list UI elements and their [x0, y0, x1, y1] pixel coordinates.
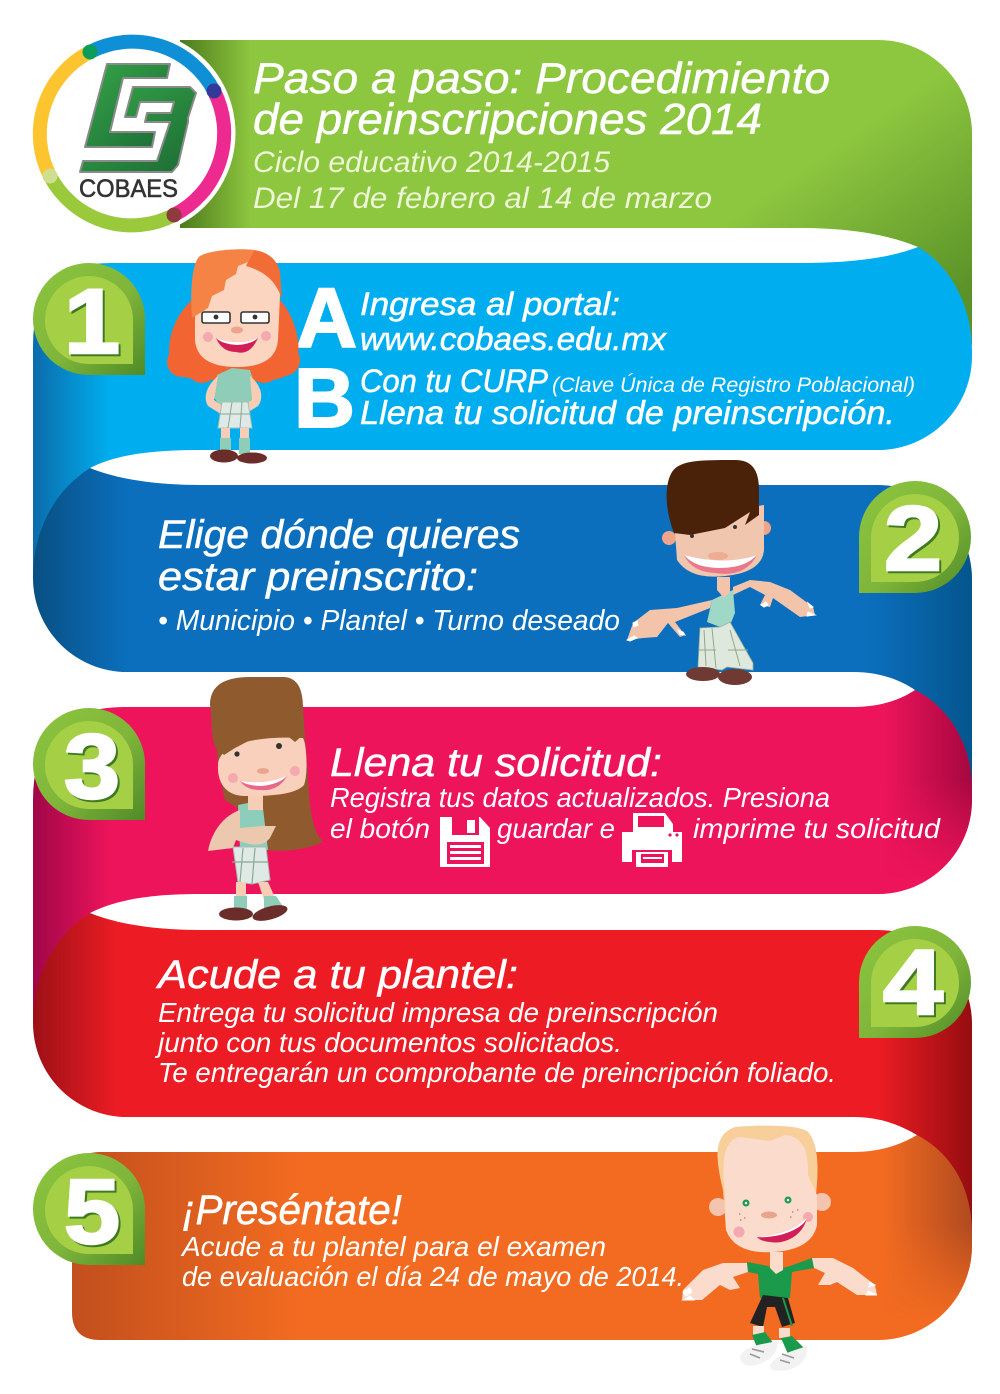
badge: number 3: [33, 708, 145, 820]
badge: number 2: [859, 481, 971, 593]
panel: step 1 blue band: [33, 228, 972, 578]
text: step 4: junto con tus documentos solicitados.: [154, 1027, 622, 1058]
badge: number 4: 4: [885, 934, 945, 1036]
character: boy with brown hair: [627, 460, 815, 685]
big letters A and B: A: [296, 271, 357, 365]
badge: number 4: [859, 926, 971, 1038]
icon: printer: [622, 813, 682, 867]
character: blond boy in sports uniform: [682, 1126, 877, 1371]
subtitle: dates: [253, 146, 712, 215]
text: step 2: Elige dónde quieres: [158, 513, 520, 557]
text: step 2: estar preinscrito:: [158, 555, 478, 599]
badge: number 5: 5: [66, 1163, 122, 1265]
text: step 2: [158, 513, 620, 637]
badge: number 3: 3: [64, 716, 120, 818]
badge: number 4: 4: [883, 932, 943, 1034]
title: [253, 54, 830, 144]
badge: number 5: [33, 1153, 145, 1265]
badge: number 1: [33, 263, 145, 375]
badge: number 3: 3: [66, 718, 122, 820]
text: step 5: [180, 1186, 684, 1292]
icon: floppy disk: [440, 817, 490, 867]
text: step 3: Llena tu solicitud:: [330, 741, 662, 785]
badge: number 2: 2: [886, 490, 944, 592]
text: step 1 instructions: Ingresa al portal:: [360, 286, 620, 322]
text: step 2: • Municipio • Plantel • Turno deseado: [158, 605, 620, 637]
text: step 3: imprime tu solicitud: [693, 813, 941, 844]
character: girl with long brown hair: [208, 677, 323, 924]
badge: number 2: 2: [884, 488, 942, 590]
title: Paso a paso: Procedimiento: [253, 54, 830, 103]
logo: COBAES: COBAES: [79, 175, 178, 203]
panel: step 4 red band: [33, 894, 972, 1240]
text: step 1 instructions: Con tu CURP: [360, 363, 549, 399]
text: step 3: guardar e: [497, 813, 615, 844]
text: step 1 instructions: Llena tu solicitud de preinscripción.: [360, 394, 895, 431]
text: step 1 instructions: [360, 286, 915, 431]
panel: step 3 magenta band: [33, 672, 972, 1023]
text: step 3: [330, 741, 941, 844]
text: step 3: Registra tus datos actualizados. Presiona: [330, 782, 830, 813]
text: step 4: Te entregarán un comprobante de preincripción foliado.: [158, 1057, 836, 1088]
text: step 5: ¡Preséntate!: [182, 1186, 402, 1233]
badge: number 1: 1: [66, 273, 122, 375]
text: step 1 instructions: (Clave Única de Registro Poblacional): [552, 374, 915, 397]
text: step 5: Acude a tu plantel para el examen: [180, 1231, 606, 1262]
text: step 4: Entrega tu solicitud impresa de preinscripción: [158, 997, 718, 1028]
big letters A and B: B: [294, 351, 355, 445]
subtitle: dates: Del 17 de febrero al 14 de marzo: [253, 182, 712, 215]
big letters A and B: [294, 271, 357, 445]
badge: number 5: 5: [64, 1161, 120, 1263]
text: step 4: Acude a tu plantel:: [156, 953, 518, 997]
panel: step 2 dark blue band: [33, 450, 972, 800]
panel: step 5 orange band: [33, 1117, 972, 1340]
text: step 4: [154, 953, 836, 1088]
panel: header band: [180, 40, 972, 345]
text: step 5: de evaluación el día 24 de mayo de 2014.: [182, 1261, 684, 1292]
title: de preinscripciones 2014: [253, 95, 762, 144]
logo: COBAES: [30, 30, 236, 236]
character: red-haired girl with glasses: [167, 249, 300, 464]
text: step 3: el botón: [330, 813, 430, 844]
subtitle: dates: Ciclo educativo 2014-2015: [253, 146, 610, 179]
badge: number 1: 1: [64, 271, 120, 373]
text: step 1 instructions: www.cobaes.edu.mx: [360, 321, 667, 357]
